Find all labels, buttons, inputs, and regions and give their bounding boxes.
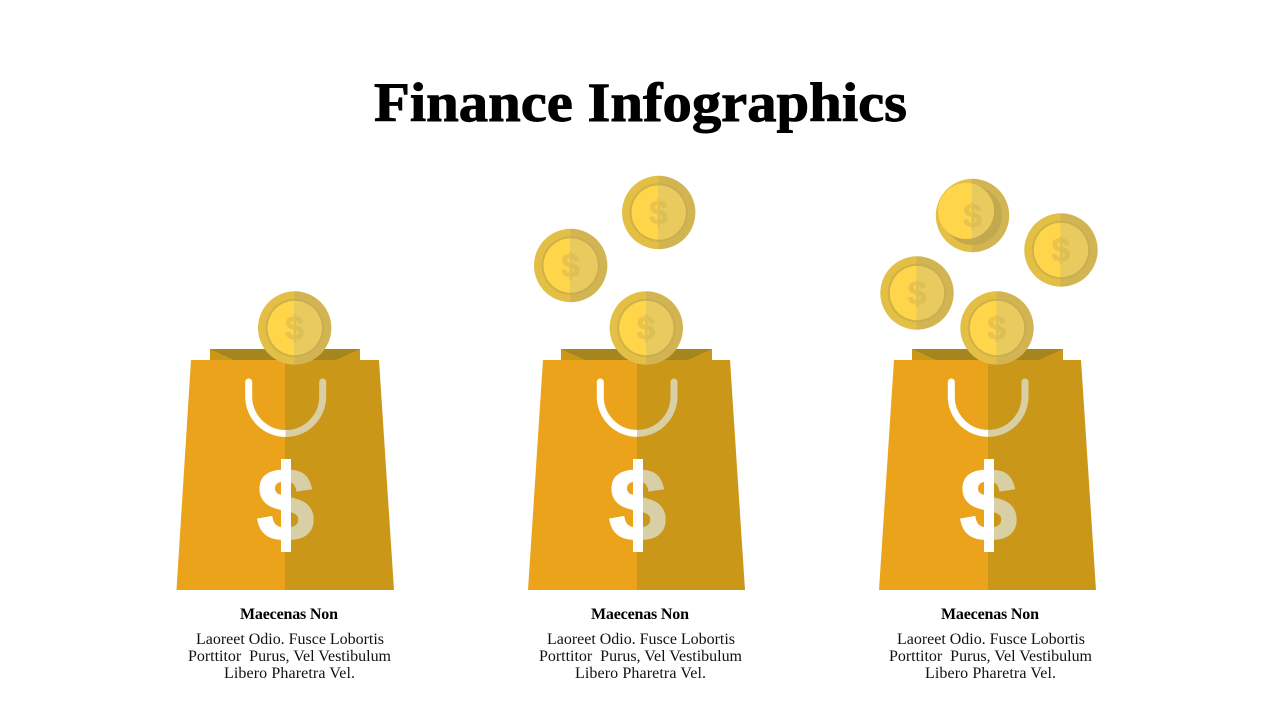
caption: Maecenas Non <box>591 606 689 623</box>
icon: coin front <box>610 291 683 365</box>
bag back flap <box>561 349 712 360</box>
caption: Maecenas Non <box>240 606 338 623</box>
icon: coin top <box>622 176 695 249</box>
caption <box>889 606 1093 682</box>
bag back flap <box>210 349 360 360</box>
bag handle <box>249 382 323 434</box>
icon: coin left <box>880 256 954 330</box>
caption: Laoreet Odio. Fusce Lobortis <box>196 631 384 648</box>
panel: bag with one coin <box>176 291 394 682</box>
panel: bag with four coins <box>879 179 1098 682</box>
title: Finance Infographics <box>374 72 907 133</box>
caption: Maecenas Non <box>941 606 1039 623</box>
icon: coin front: $ <box>637 310 655 346</box>
caption: Laoreet Odio. Fusce Lobortis <box>547 631 735 648</box>
caption: Porttitor Purus, Vel Vestibulum <box>539 648 743 665</box>
caption: Laoreet Odio. Fusce Lobortis <box>897 631 1085 648</box>
icon: coin top: $ <box>649 194 668 231</box>
icon: coin front <box>960 291 1034 365</box>
icon: coin right <box>1024 213 1098 287</box>
caption: Libero Pharetra Vel. <box>925 665 1056 682</box>
caption: Libero Pharetra Vel. <box>224 665 355 682</box>
bag body <box>528 360 745 590</box>
icon: coin <box>258 291 331 365</box>
icon: bag dollar sign: $ <box>960 448 1017 562</box>
bag body <box>176 360 394 590</box>
bag body <box>879 360 1096 590</box>
icon: coin left <box>534 229 607 302</box>
panel: bag with three coins <box>528 176 745 682</box>
icon: bag dollar sign: $ <box>609 448 666 562</box>
caption: Porttitor Purus, Vel Vestibulum <box>188 648 392 665</box>
icon: coin right: $ <box>1052 232 1070 268</box>
caption <box>539 606 743 682</box>
caption: Libero Pharetra Vel. <box>575 665 706 682</box>
bag back flap <box>912 349 1063 360</box>
icon: bag dollar sign: $ <box>257 448 314 562</box>
bag handle <box>951 382 1025 433</box>
icon: coin front: $ <box>988 310 1006 346</box>
icon: coin left: $ <box>561 247 580 284</box>
caption: Porttitor Purus, Vel Vestibulum <box>889 648 1093 665</box>
icon: coin left: $ <box>908 274 926 312</box>
bag handle <box>600 382 674 433</box>
icon: coin shaded top <box>936 179 1009 252</box>
icon: coin: $ <box>285 310 304 346</box>
icon: coin shaded top: $ <box>963 197 982 234</box>
caption <box>188 606 392 682</box>
